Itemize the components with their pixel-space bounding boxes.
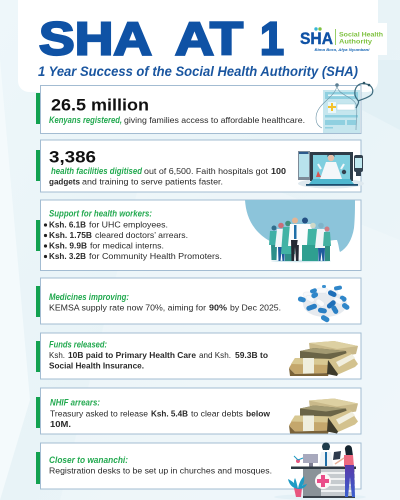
text: registration desks: Registration desks to be set up in churches and mosques. bbox=[49, 466, 272, 476]
stat: 26.5 million: 26.5 million bbox=[51, 96, 149, 114]
text: NHIF line 1: Treasury asked to release bbox=[50, 408, 148, 418]
bullet list: for Community Health Promoters. bbox=[89, 251, 222, 261]
heading: funds: Funds released: bbox=[49, 340, 107, 350]
panel: NHIF arrears: to clear debts bbox=[191, 408, 243, 418]
logo wordmark: SHA bbox=[300, 29, 333, 48]
panel: registrations bbox=[36, 82, 373, 134]
logo dots bbox=[314, 27, 322, 31]
title bbox=[39, 12, 284, 64]
panel: NHIF arrears: below bbox=[246, 408, 270, 418]
illustration: health workers bbox=[269, 218, 331, 262]
logo tagline: Bima Bora, Afya Nyumbani bbox=[314, 47, 370, 52]
text: NHIF line 2: 10M. bbox=[50, 419, 71, 429]
panel: digitised facilities: 100 bbox=[271, 166, 286, 176]
text: KEMSA: KEMSA supply rate now 70%, aiming for bbox=[49, 303, 206, 313]
bullet list: for medical interns. bbox=[90, 240, 164, 250]
logo: Social Health Authority bbox=[295, 23, 387, 55]
bullet list: Ksh. 9.9B bbox=[49, 240, 87, 250]
panel: medicines: 90% bbox=[209, 303, 227, 313]
icon: money stacks bbox=[289, 341, 358, 376]
panel: digitised facilities: out of 6,500. Faith hospitals got bbox=[144, 166, 269, 176]
text: facilities line 2: gadgets bbox=[49, 176, 80, 186]
bullet list: Ksh. 1.75B bbox=[49, 230, 92, 240]
icon: capsules bbox=[297, 285, 350, 323]
panel: funds released: 59.3B to bbox=[235, 350, 268, 360]
title: AT bbox=[175, 12, 243, 64]
bullet list: for UHC employees. bbox=[89, 220, 168, 230]
stat: 3,386: 3,386 bbox=[49, 148, 96, 166]
panel: medicines bbox=[36, 278, 361, 324]
panel: closer to wananchi bbox=[36, 442, 366, 500]
text: funds line 1: Ksh. bbox=[49, 350, 65, 360]
heading: support: Support for health workers: bbox=[49, 209, 152, 219]
icon: laptop and devices bbox=[298, 151, 364, 188]
title: SHA bbox=[39, 12, 152, 64]
panel: funds released bbox=[36, 333, 361, 379]
heading: closer: Closer to wananchi: bbox=[49, 455, 128, 465]
text: funds line 2: Social Health Insurance. bbox=[49, 361, 144, 371]
text: registered: Kenyans registered, bbox=[49, 115, 122, 125]
text: access: giving families access to affordable healthcare. bbox=[124, 115, 305, 125]
subtitle: 1 Year Success of the Social Health Authority (SHA) bbox=[38, 63, 358, 79]
illustration: reception desk bbox=[274, 442, 366, 500]
panel: digitised facilities bbox=[36, 140, 364, 192]
icon: money stacks bbox=[289, 398, 358, 434]
panel: NHIF arrears bbox=[36, 388, 361, 434]
panel: medicines: by Dec 2025. bbox=[230, 303, 281, 313]
panel: funds released: 10B paid to Primary Health Care bbox=[68, 350, 196, 360]
header panel bbox=[18, 0, 378, 92]
panel: NHIF arrears: Ksh. 5.4B bbox=[151, 408, 188, 418]
logo name line 1: Social Health bbox=[339, 32, 383, 38]
illustration: speech blob bbox=[245, 200, 355, 252]
icon: registration form and stethoscope bbox=[316, 82, 373, 133]
text: facilities line 1: health facilities digitised bbox=[51, 166, 143, 176]
title: 1 bbox=[260, 12, 284, 64]
panel: digitised facilities: and training to serve patients faster. bbox=[82, 176, 223, 186]
heading: NHIF: NHIF arrears: bbox=[50, 398, 100, 408]
logo name line 2: Authority bbox=[339, 38, 372, 46]
bullet list: cleared doctors’ arrears. bbox=[95, 230, 188, 240]
bullet list: Ksh. 6.1B bbox=[49, 220, 86, 230]
heading: medicines: Medicines improving: bbox=[49, 292, 129, 302]
panel: support for health workers bbox=[36, 200, 361, 270]
bullet list bbox=[44, 220, 222, 261]
panel: funds released: and Ksh. bbox=[199, 350, 231, 360]
bullet list: Ksh. 3.2B bbox=[49, 251, 86, 261]
